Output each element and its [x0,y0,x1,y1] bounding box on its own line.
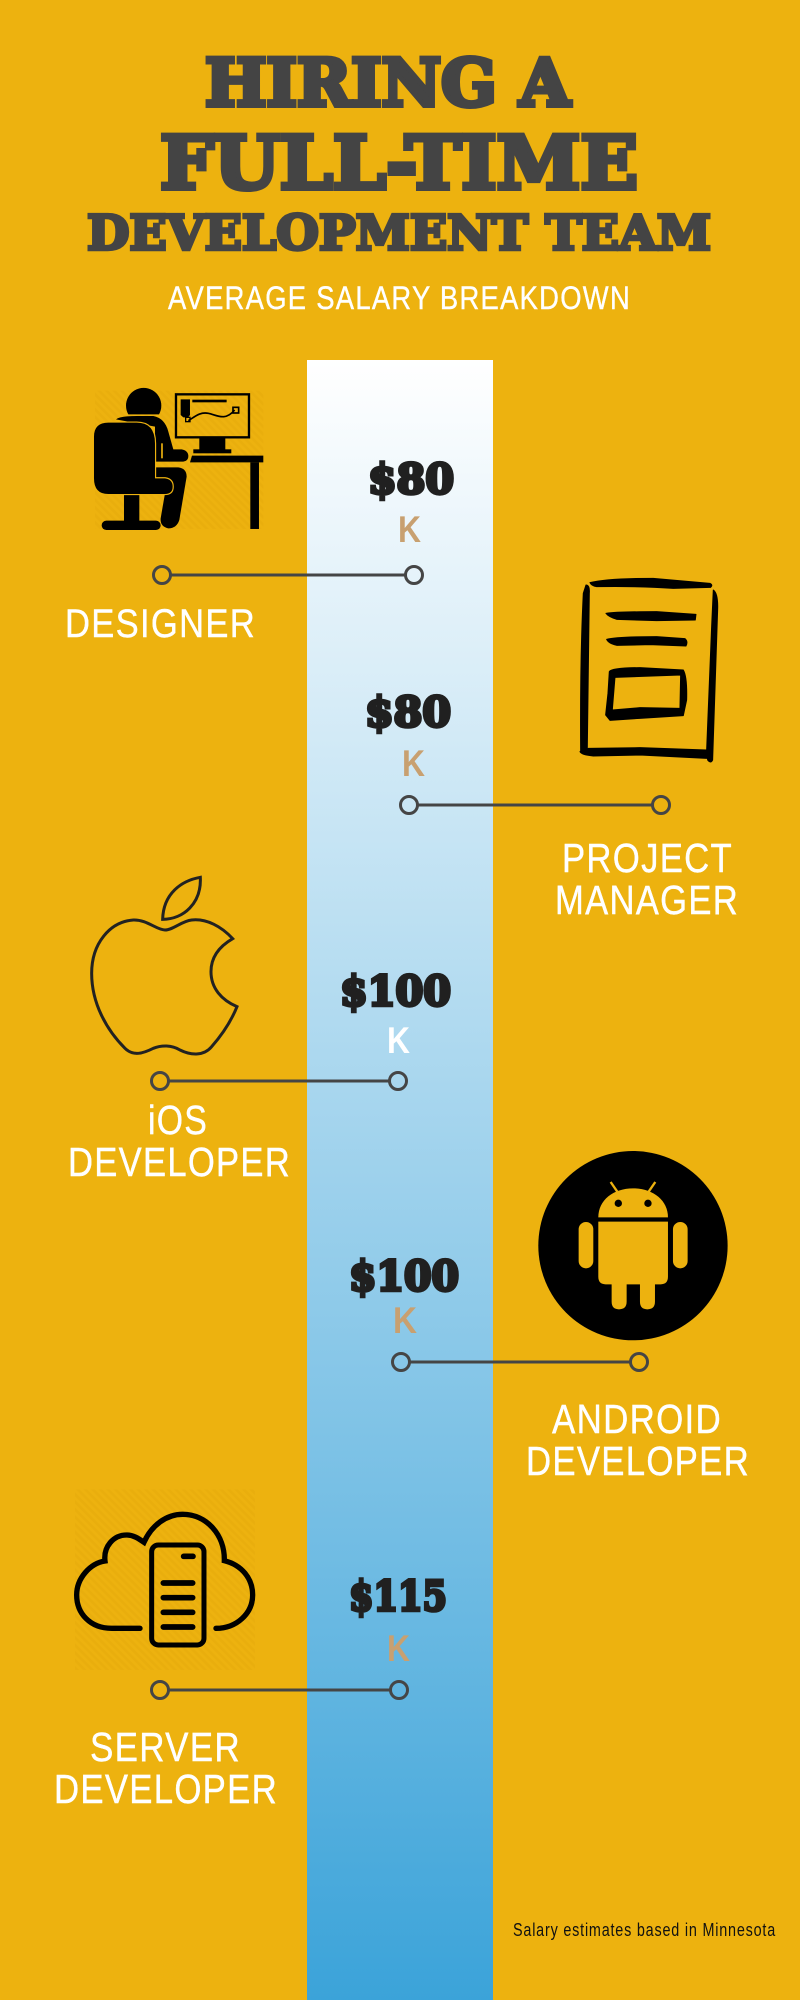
subtitle: AVERAGE SALARY BREAKDOWN [168,280,631,316]
label: project manager: PROJECT [562,835,733,881]
label: iOS developer: iOS [148,1097,208,1143]
icon: apple outline [92,877,237,1054]
salary: iOS developer: $100 [340,968,451,1016]
icon: cloud server [75,1489,255,1670]
connector: iOS developer [152,1072,406,1090]
salary: project manager: K [402,743,425,784]
label: project manager: MANAGER [555,877,739,923]
salary: designer: K [398,509,421,550]
label: android developer: ANDROID [552,1396,722,1442]
connector: android developer [392,1354,648,1370]
title line 2: FULL-TIME [160,120,638,206]
gradient salary column [307,360,493,2000]
salary: android developer [349,1252,459,1341]
connector: project manager [400,796,670,814]
label: iOS developer [68,1097,291,1185]
salary: iOS developer: K [387,1020,410,1061]
connector: designer [154,566,422,584]
salary: server developer: $115 [349,1572,447,1620]
salary: designer [368,456,454,550]
connector: server developer [152,1682,408,1698]
salary: iOS developer [340,968,451,1061]
icon: project document [580,578,718,762]
label: project manager [555,835,739,923]
label: iOS developer: DEVELOPER [68,1139,291,1185]
salary: android developer: $100 [349,1252,459,1300]
label: android developer: DEVELOPER [526,1438,750,1484]
label: server developer [54,1724,278,1812]
label: server developer: DEVELOPER [54,1766,278,1812]
salary: server developer [349,1572,447,1669]
salary: project manager [365,688,451,784]
label: android developer [526,1396,750,1484]
title line 1: HIRING A [205,46,572,122]
label: server developer: SERVER [90,1724,241,1770]
salary: server developer: K [387,1628,410,1669]
salary: android developer: K [393,1300,417,1341]
label: designer: DESIGNER [65,602,256,646]
icon: designer at desk [94,388,263,530]
salary: project manager: $80 [365,688,451,736]
icon: android in black circle [538,1151,728,1340]
salary: designer: $80 [368,456,454,504]
title line 3: DEVELOPMENT TEAM [87,205,711,261]
title [87,46,711,261]
